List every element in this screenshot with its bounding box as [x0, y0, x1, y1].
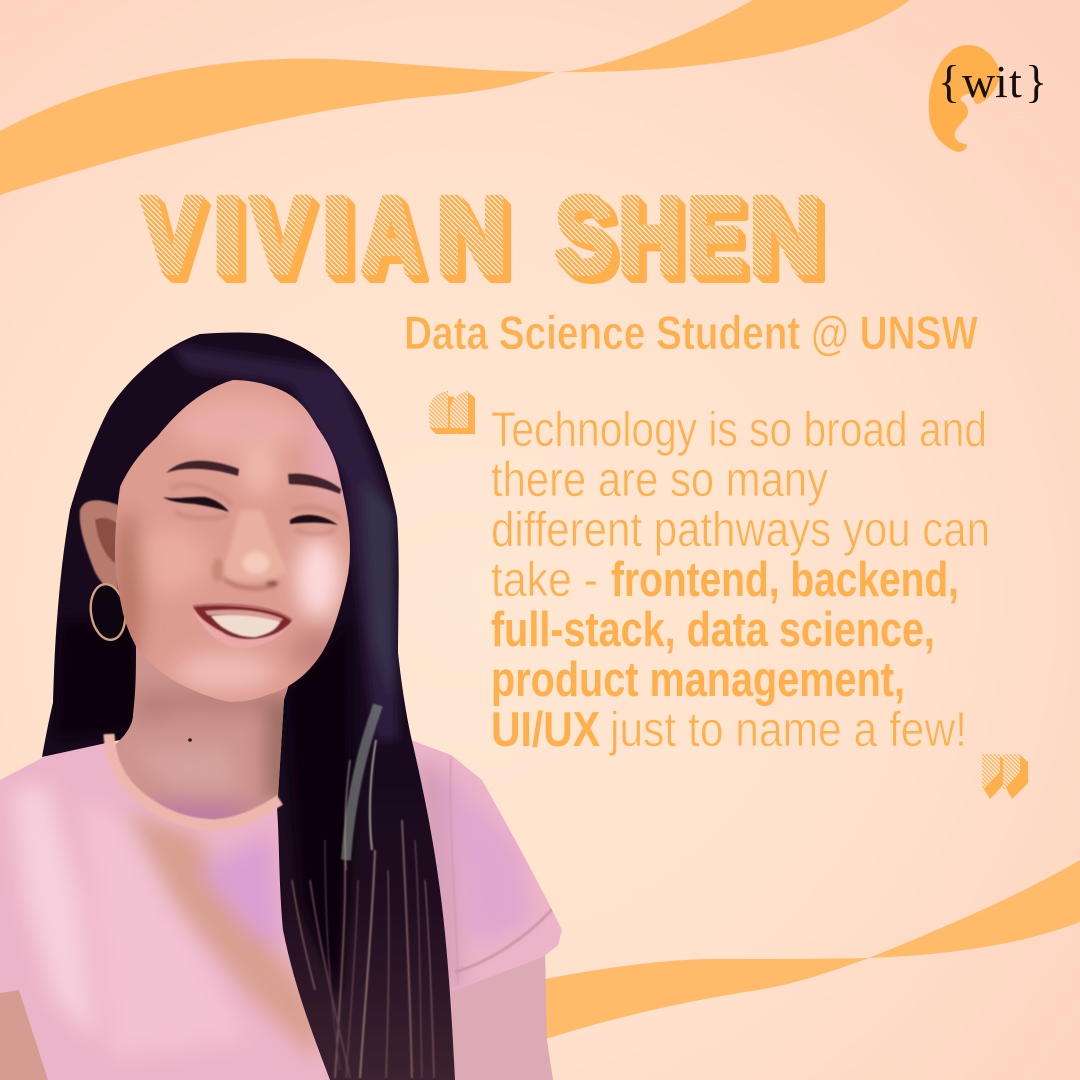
left arm — [0, 985, 52, 1080]
logo wordmark: {wit} — [938, 56, 1047, 107]
icon: closing quote — [982, 754, 1028, 799]
title: name: N — [436, 174, 507, 295]
quote text: product management, — [491, 653, 905, 707]
title: name: E — [687, 174, 743, 295]
logo blob — [929, 45, 1000, 152]
bottom ribbon wave — [530, 860, 1080, 1044]
title: name: V — [141, 174, 201, 295]
quote text — [491, 403, 990, 757]
subtitle: Data Science Student @ UNSW — [404, 306, 979, 359]
shirt collar — [109, 734, 280, 825]
top ribbon wave — [0, 0, 910, 195]
title: name: V — [250, 174, 310, 295]
quote text: UI/UX — [491, 703, 600, 757]
hair — [30, 325, 470, 1080]
hair strands on forehead — [120, 478, 124, 488]
left eye — [163, 497, 229, 512]
mouth — [193, 604, 292, 648]
shirt — [0, 720, 570, 1080]
quote text: there are so many — [491, 453, 828, 507]
ear — [80, 500, 118, 592]
right eye — [290, 515, 338, 525]
eye shadows — [170, 485, 340, 534]
face — [115, 380, 350, 702]
quote text: frontend, backend, — [611, 553, 959, 607]
title: name: H — [618, 174, 681, 295]
portrait photo — [0, 325, 570, 1080]
title: name — [141, 174, 821, 295]
title: name: A — [361, 174, 421, 295]
title: name: S — [555, 174, 613, 295]
quote text: just to name a few! — [608, 703, 967, 757]
quote text: different pathways you can — [491, 503, 990, 557]
right arm — [445, 950, 553, 1080]
quote text: Technology is so broad and — [491, 403, 987, 457]
quote text: take - — [491, 553, 598, 607]
logo: wit — [929, 45, 1047, 152]
earring — [87, 582, 129, 642]
title: name: I — [322, 174, 352, 295]
title: name: N — [749, 174, 821, 295]
quote text: full-stack, data science, — [491, 603, 935, 657]
icon: opening quote — [429, 391, 475, 434]
nose — [212, 510, 287, 588]
neck — [115, 646, 288, 820]
title: name: I — [212, 174, 243, 295]
right eyebrow — [288, 474, 341, 494]
left eyebrow — [166, 461, 239, 476]
